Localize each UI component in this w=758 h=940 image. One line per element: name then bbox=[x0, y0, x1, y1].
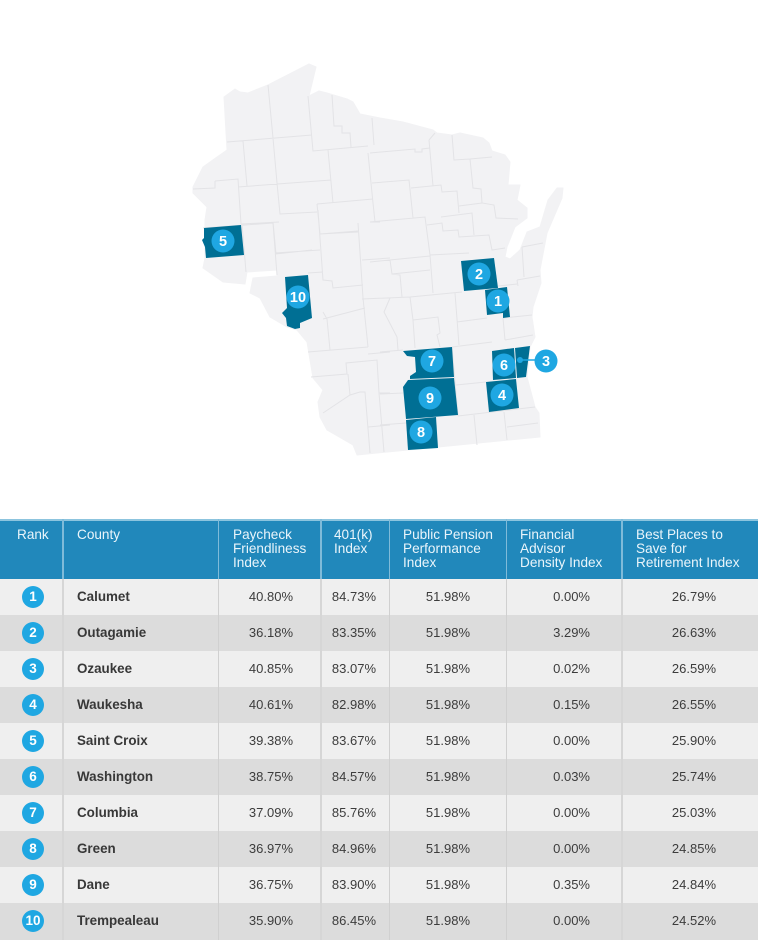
row 5: 83.67% bbox=[332, 733, 376, 748]
row 6: Washington bbox=[77, 769, 153, 784]
row 5: 39.38% bbox=[249, 733, 293, 748]
row 1: 40.80% bbox=[249, 589, 293, 604]
row 4 bbox=[0, 687, 758, 723]
highlighted counties bbox=[202, 225, 530, 450]
row 7: 85.76% bbox=[332, 805, 376, 820]
table header: Friendliness bbox=[233, 541, 306, 556]
row 7: 0.00% bbox=[553, 805, 590, 820]
row 3: 26.59% bbox=[672, 661, 716, 676]
row 4: 82.98% bbox=[332, 697, 376, 712]
row 2 bbox=[0, 615, 758, 651]
row 9: 36.75% bbox=[249, 877, 293, 892]
row 4: 26.55% bbox=[672, 697, 716, 712]
row 9: Dane bbox=[77, 877, 110, 892]
row 3: 0.02% bbox=[553, 661, 590, 676]
row 5 bbox=[0, 723, 758, 759]
row 4: 4 bbox=[29, 697, 37, 712]
row 8: 24.85% bbox=[672, 841, 716, 856]
row 1 bbox=[0, 579, 758, 615]
row 7: 37.09% bbox=[249, 805, 293, 820]
table header: Best Places to bbox=[636, 527, 723, 542]
row 4: 0.15% bbox=[553, 697, 590, 712]
map rank badges: 1 bbox=[494, 294, 502, 310]
row 5: 51.98% bbox=[426, 733, 470, 748]
row 6: 38.75% bbox=[249, 769, 293, 784]
row 8: 84.96% bbox=[332, 841, 376, 856]
row 8: 8 bbox=[29, 841, 37, 856]
row 5: Saint Croix bbox=[77, 733, 148, 748]
table header: 401(k) bbox=[334, 527, 373, 542]
map rank badges: 7 bbox=[428, 354, 436, 370]
row 3: 51.98% bbox=[426, 661, 470, 676]
map rank badges: 2 bbox=[475, 267, 483, 283]
row 4: 51.98% bbox=[426, 697, 470, 712]
state outline bbox=[193, 64, 563, 455]
row 6: 0.03% bbox=[553, 769, 590, 784]
row 2: 3.29% bbox=[553, 625, 590, 640]
table header: Retirement Index bbox=[636, 555, 740, 570]
row 3: 3 bbox=[29, 661, 37, 676]
map rank badges: 3 bbox=[542, 354, 550, 370]
row 8: 0.00% bbox=[553, 841, 590, 856]
table header: Performance bbox=[403, 541, 481, 556]
row 7 bbox=[0, 795, 758, 831]
row 2: 26.63% bbox=[672, 625, 716, 640]
row 1: 84.73% bbox=[332, 589, 376, 604]
row 1: Calumet bbox=[77, 589, 130, 604]
row 6 bbox=[0, 759, 758, 795]
row 10: 86.45% bbox=[332, 913, 376, 928]
county boundaries bbox=[193, 85, 543, 453]
row 8: 36.97% bbox=[249, 841, 293, 856]
row 3 bbox=[0, 651, 758, 687]
row 1: 1 bbox=[29, 589, 37, 604]
map rank badges: 8 bbox=[417, 425, 425, 441]
row 8: 51.98% bbox=[426, 841, 470, 856]
row 2: 2 bbox=[29, 625, 37, 640]
table header: Advisor bbox=[520, 541, 565, 556]
map rank badges: 6 bbox=[500, 358, 508, 374]
row 3: Ozaukee bbox=[77, 661, 132, 676]
row 3: 83.07% bbox=[332, 661, 376, 676]
map rank badges: 5 bbox=[219, 234, 227, 250]
row 10: 24.52% bbox=[672, 913, 716, 928]
row 7: Columbia bbox=[77, 805, 138, 820]
row 9: 9 bbox=[29, 877, 37, 892]
row 7: 25.03% bbox=[672, 805, 716, 820]
table header: Index bbox=[233, 555, 266, 570]
row 10: 35.90% bbox=[249, 913, 293, 928]
map rank badges: 10 bbox=[290, 290, 306, 306]
connector for county 3 bbox=[517, 357, 540, 363]
table header: Paycheck bbox=[233, 527, 292, 542]
table header: Index bbox=[334, 541, 367, 556]
row 8 bbox=[0, 831, 758, 867]
row 2: 51.98% bbox=[426, 625, 470, 640]
row 1: 0.00% bbox=[553, 589, 590, 604]
row 10: Trempealeau bbox=[77, 913, 159, 928]
table header: Density Index bbox=[520, 555, 602, 570]
row 9: 24.84% bbox=[672, 877, 716, 892]
table header: County bbox=[77, 527, 120, 542]
row 4: 40.61% bbox=[249, 697, 293, 712]
table header: Public Pension bbox=[403, 527, 493, 542]
row 5: 25.90% bbox=[672, 733, 716, 748]
map rank badges bbox=[212, 230, 558, 444]
map rank badges: 4 bbox=[498, 388, 506, 404]
row 10 bbox=[0, 903, 758, 940]
row 2: Outagamie bbox=[77, 625, 146, 640]
row 7: 51.98% bbox=[426, 805, 470, 820]
row 8: Green bbox=[77, 841, 116, 856]
table header bbox=[0, 519, 758, 579]
table header: Save for bbox=[636, 541, 687, 556]
row 6: 25.74% bbox=[672, 769, 716, 784]
row 10: 10 bbox=[25, 913, 41, 928]
row 2: 36.18% bbox=[249, 625, 293, 640]
row 9: 51.98% bbox=[426, 877, 470, 892]
map rank badges: 9 bbox=[426, 391, 434, 407]
table header: Rank bbox=[17, 527, 49, 542]
row 6: 6 bbox=[29, 769, 37, 784]
row 3: 40.85% bbox=[249, 661, 293, 676]
row 2: 83.35% bbox=[332, 625, 376, 640]
row 4: Waukesha bbox=[77, 697, 143, 712]
row 1: 51.98% bbox=[426, 589, 470, 604]
row 7: 7 bbox=[29, 805, 37, 820]
row 10: 0.00% bbox=[553, 913, 590, 928]
row 9: 83.90% bbox=[332, 877, 376, 892]
row 1: 26.79% bbox=[672, 589, 716, 604]
table header: Financial bbox=[520, 527, 574, 542]
row 5: 0.00% bbox=[553, 733, 590, 748]
row 6: 84.57% bbox=[332, 769, 376, 784]
table header: Index bbox=[403, 555, 436, 570]
row 9: 0.35% bbox=[553, 877, 590, 892]
row 6: 51.98% bbox=[426, 769, 470, 784]
map of Wisconsin counties bbox=[192, 64, 564, 456]
row 5: 5 bbox=[29, 733, 37, 748]
row 9 bbox=[0, 867, 758, 903]
row 10: 51.98% bbox=[426, 913, 470, 928]
